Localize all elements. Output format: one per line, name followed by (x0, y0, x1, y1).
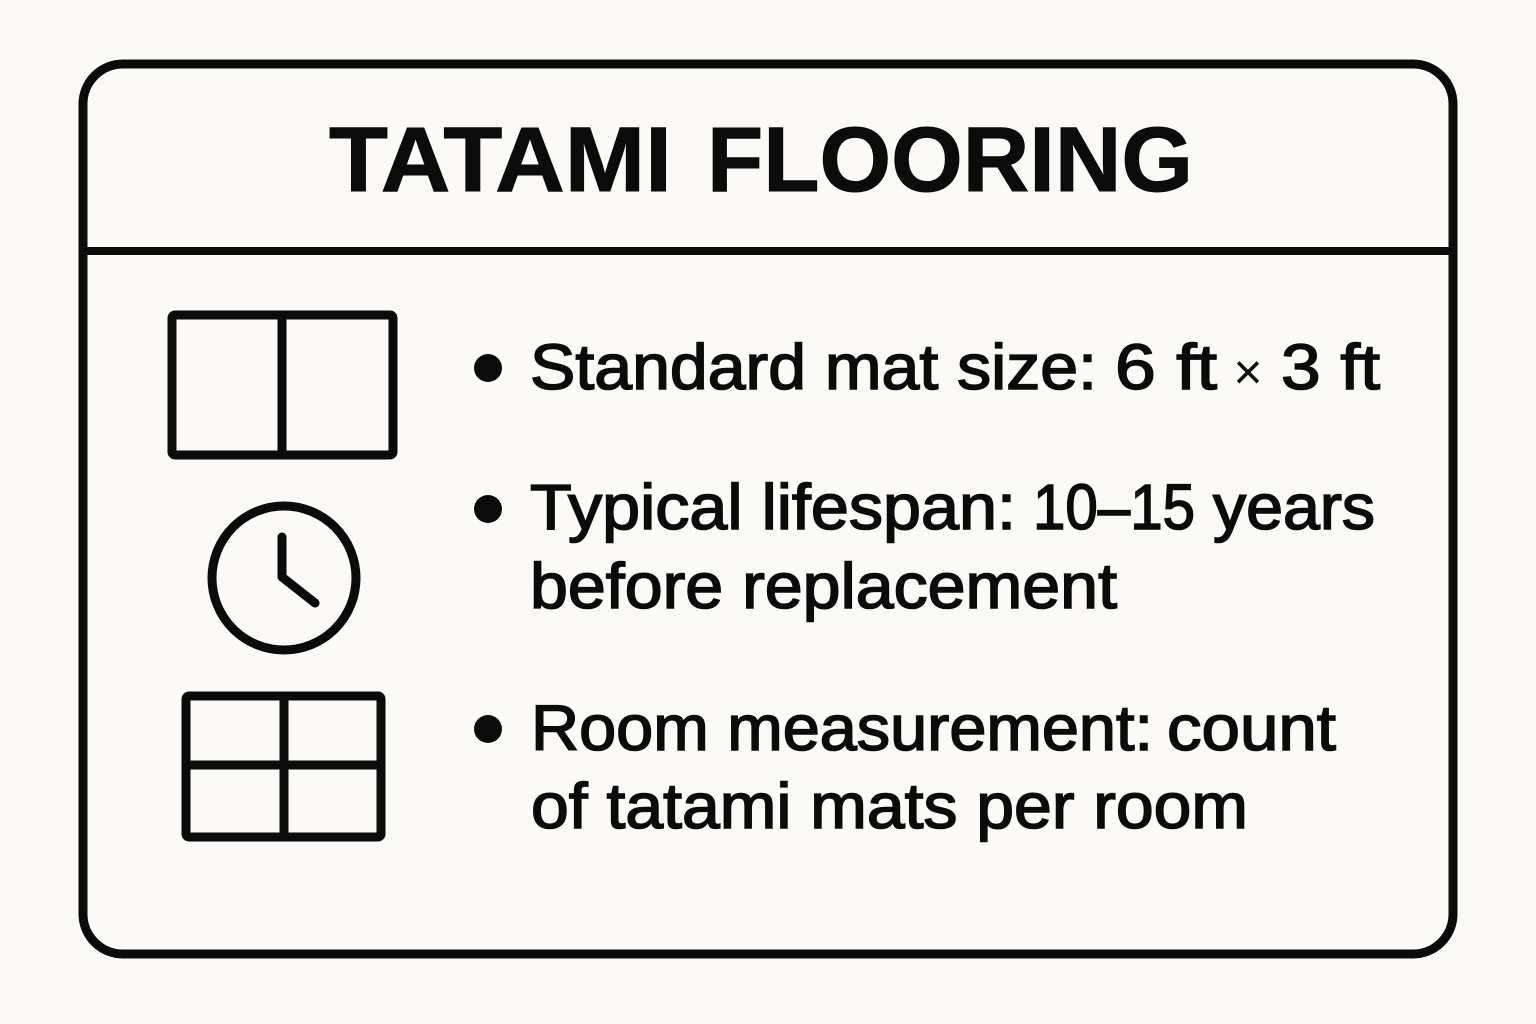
bullet: mat size: Standard mat size: (530, 331, 1097, 403)
title: TATAMI (329, 109, 672, 211)
icon: clock (212, 506, 356, 650)
icon: two-panel tatami mat (172, 315, 393, 455)
bullet: lifespan: years (1213, 471, 1375, 543)
bullet: lifespan: 10–15 (1033, 471, 1195, 543)
panel: tatami flooring card (83, 64, 1453, 954)
bullet: lifespan: before replacement (530, 550, 1117, 622)
icon: four-panel room grid (186, 696, 381, 837)
bullet: mat size: 3 ft (1281, 331, 1380, 403)
bullet: lifespan: Typical lifespan: (530, 471, 1016, 543)
bullet: room measurement: Room measurement: (531, 692, 1153, 764)
title: FLOORING (707, 109, 1193, 211)
bullet: room measurement: count (1167, 692, 1336, 764)
title (329, 109, 1193, 211)
bullet: mat size (474, 331, 1380, 403)
bullet: lifespan (474, 471, 1375, 622)
bullet: room measurement: of tatami mats per room (531, 770, 1248, 842)
bullet: mat size: 6 ft (1115, 331, 1217, 403)
bullet: mat size: × (1233, 344, 1263, 400)
bullet: room measurement (474, 692, 1336, 842)
